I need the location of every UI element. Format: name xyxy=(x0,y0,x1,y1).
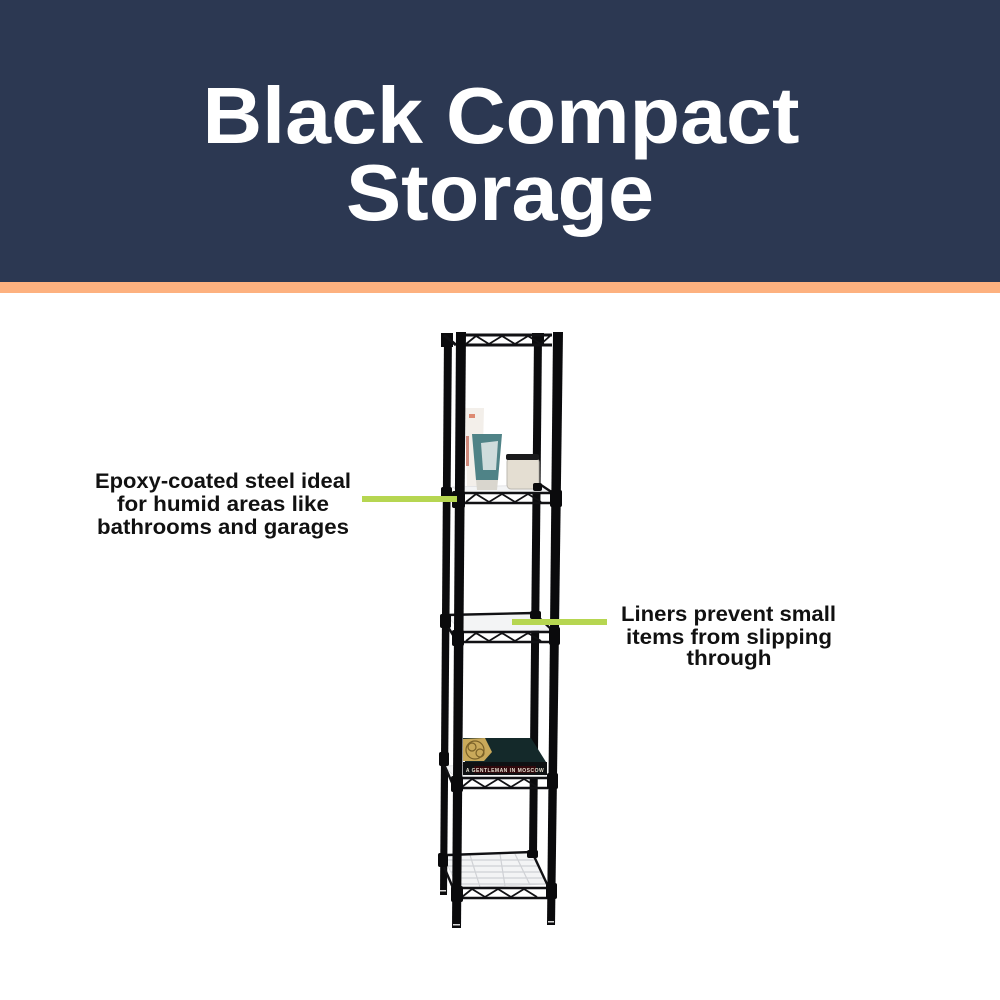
callout: epoxy-coated steel xyxy=(95,470,457,539)
shelving unit xyxy=(438,332,563,928)
shelf liners xyxy=(443,485,552,888)
title xyxy=(202,71,800,237)
post feet highlights xyxy=(440,890,554,926)
green leader line xyxy=(362,496,457,502)
callout text xyxy=(621,603,836,670)
title: Storage xyxy=(346,148,654,237)
callout: liners xyxy=(512,603,836,670)
front posts xyxy=(452,332,563,928)
second shelf xyxy=(443,485,553,503)
callout text: through xyxy=(686,647,772,670)
candle jar xyxy=(507,458,539,489)
callout text: Liners prevent small xyxy=(621,603,836,626)
callout text xyxy=(95,470,351,539)
top shelf xyxy=(444,335,552,345)
third shelf xyxy=(442,613,552,642)
bottom shelf xyxy=(439,852,548,898)
white tube xyxy=(465,408,484,486)
post collars xyxy=(438,483,562,902)
callout text: Epoxy-coated steel ideal xyxy=(95,470,351,493)
shelf wire frames xyxy=(439,335,553,898)
fourth shelf xyxy=(440,755,548,788)
header banner xyxy=(0,0,1000,282)
title: Black Compact xyxy=(202,71,800,160)
teal tube xyxy=(472,434,502,480)
callout text: for humid areas like xyxy=(117,493,329,516)
green leader line xyxy=(512,619,607,625)
orange accent band xyxy=(0,282,1000,293)
items: books and beads xyxy=(463,738,547,775)
items: tubes and jar xyxy=(465,408,539,490)
back posts xyxy=(440,333,544,895)
liner grid on bottom shelf xyxy=(446,854,547,887)
callout text: bathrooms and garages xyxy=(97,516,349,539)
callout text: items from slipping xyxy=(626,626,832,649)
items: books and beads: A GENTLEMAN IN MOSCOW xyxy=(466,768,544,774)
